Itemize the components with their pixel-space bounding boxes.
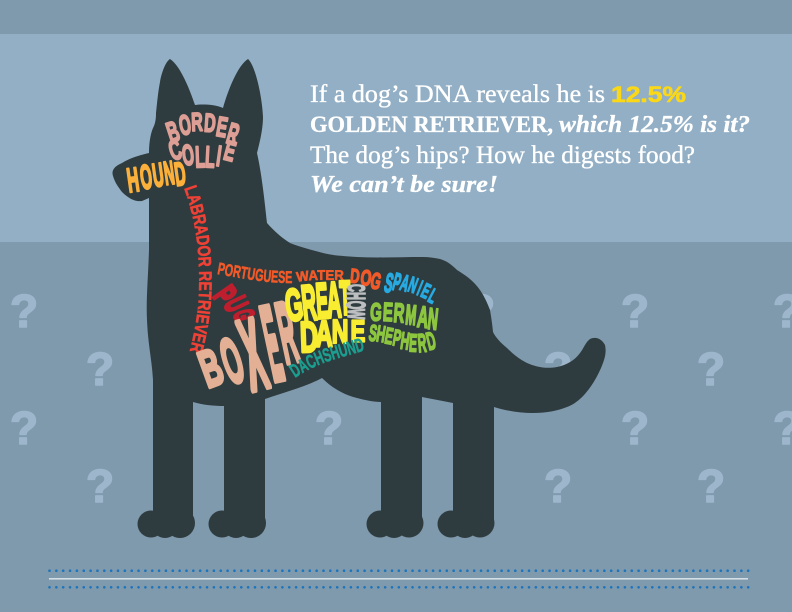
breed: border collie: O (177, 109, 193, 142)
breed: german shepherd: D (424, 327, 439, 356)
breed: boxer: O (212, 325, 252, 398)
breed: german shepherd: R (417, 330, 428, 359)
headline text: We can’t be sure! (310, 172, 498, 198)
breed: spaniel: S (382, 268, 396, 299)
breed: german shepherd (367, 297, 440, 359)
breed: great dane: N (332, 314, 348, 351)
breed: portuguese water dog: WATER (295, 270, 344, 282)
breed: boxer (191, 285, 305, 411)
question mark pattern: ? (697, 343, 725, 395)
breed: dachshund: DACHSHUND (288, 338, 364, 378)
question mark pattern: ? (86, 460, 114, 512)
breed: boxer: X (230, 298, 276, 411)
breed: german shepherd: E (382, 299, 394, 327)
footer rule (49, 571, 749, 587)
breed: portuguese water dog: O (359, 265, 373, 291)
breed: boxer: R (269, 285, 305, 382)
breed: great dane: T (339, 270, 351, 325)
breed: border collie (163, 107, 242, 175)
breed: boxer: B (191, 337, 230, 399)
breed: great dane: R (299, 276, 319, 332)
breed: german shepherd: P (391, 324, 403, 351)
breed: pug: G (227, 306, 261, 324)
breed: spaniel: N (405, 272, 421, 298)
question mark pattern: ? (544, 460, 572, 512)
breed: great dane: D (299, 313, 319, 362)
breed: spaniel: P (390, 269, 404, 297)
breed: german shepherd: E (408, 330, 418, 358)
breed: great dane (282, 270, 365, 362)
breed: portuguese water dog: D (349, 265, 361, 288)
breed: chow (341, 284, 370, 319)
breed: great dane: G (282, 279, 306, 331)
breed: spaniel: I (414, 277, 426, 300)
dog silhouette (112, 59, 606, 538)
breed: border collie: O (180, 138, 196, 172)
question mark pattern: ? (315, 402, 343, 454)
breed: portuguese water dog (217, 262, 384, 295)
breed: chow: C (343, 284, 370, 292)
breed: border collie: R (223, 118, 242, 153)
headline text: If a dog’s DNA reveals he is (310, 81, 605, 108)
breed: border collie: E (214, 110, 230, 143)
breed: border collie: B (163, 115, 183, 149)
breed: german shepherd: E (383, 322, 395, 349)
question mark pattern: ? (697, 460, 725, 512)
breed: hound: H (125, 160, 141, 200)
headline text: 12.5% (611, 82, 686, 107)
breed: border collie: L (195, 141, 206, 175)
breed: german shepherd: M (404, 298, 418, 331)
question mark pattern: ? (10, 285, 38, 337)
breed: border collie: R (191, 107, 204, 137)
breed: great dane: A (315, 313, 333, 355)
breed: border collie: I (215, 140, 223, 172)
question mark pattern: ? (467, 285, 495, 337)
breed: hound: O (138, 157, 154, 197)
breed: german shepherd: H (375, 320, 387, 347)
question mark pattern: ? (621, 402, 649, 454)
breed: border collie: L (204, 141, 216, 175)
breed: hound: U (150, 157, 166, 195)
breed: chow: H (341, 292, 369, 300)
question mark pattern: ? (10, 402, 38, 454)
breed: german shepherd: N (426, 302, 440, 336)
breed: spaniel: E (418, 279, 434, 304)
headline text (310, 81, 750, 198)
breed: portuguese water dog: G (368, 267, 384, 295)
breed: pug: P (206, 279, 244, 311)
breed: spaniel: L (424, 284, 441, 308)
breed: spaniel: A (397, 270, 413, 297)
question mark pattern: ? (544, 343, 572, 395)
breed: hound (125, 155, 188, 200)
breed: great dane: E (314, 272, 330, 329)
headline text: The dog’s hips? How he digests food? (310, 142, 695, 169)
breed: labrador retriever: LABRADOR RETRIEVER (184, 184, 212, 352)
breed: border collie: C (164, 133, 185, 167)
breed: german shepherd: R (393, 297, 406, 329)
breed: german shepherd: H (399, 328, 411, 356)
breed: chow: W (343, 309, 370, 319)
breed: hound: D (172, 156, 188, 194)
breed: great dane: E (351, 314, 365, 348)
breed: portuguese water dog: PORTUGUESE (217, 262, 292, 284)
breed: great dane: A (325, 273, 343, 329)
breed: chow: O (341, 301, 369, 309)
breed: hound: N (162, 155, 177, 193)
breed: border collie: E (221, 134, 239, 168)
breed: german shepherd: G (369, 298, 383, 327)
question mark pattern: ? (621, 285, 649, 337)
breed: boxer: E (253, 285, 291, 404)
headline text: which 12.5% is it? (559, 112, 750, 138)
breed: border collie: D (203, 107, 217, 138)
breed: pug: U (217, 292, 254, 317)
breed: pug (206, 279, 261, 324)
headline text: GOLDEN RETRIEVER, (310, 112, 553, 137)
question mark pattern (10, 285, 792, 512)
breed: german shepherd: A (416, 301, 430, 335)
breed: german shepherd: S (367, 319, 379, 346)
question mark pattern: ? (86, 343, 114, 395)
breed: spaniel (382, 268, 441, 308)
